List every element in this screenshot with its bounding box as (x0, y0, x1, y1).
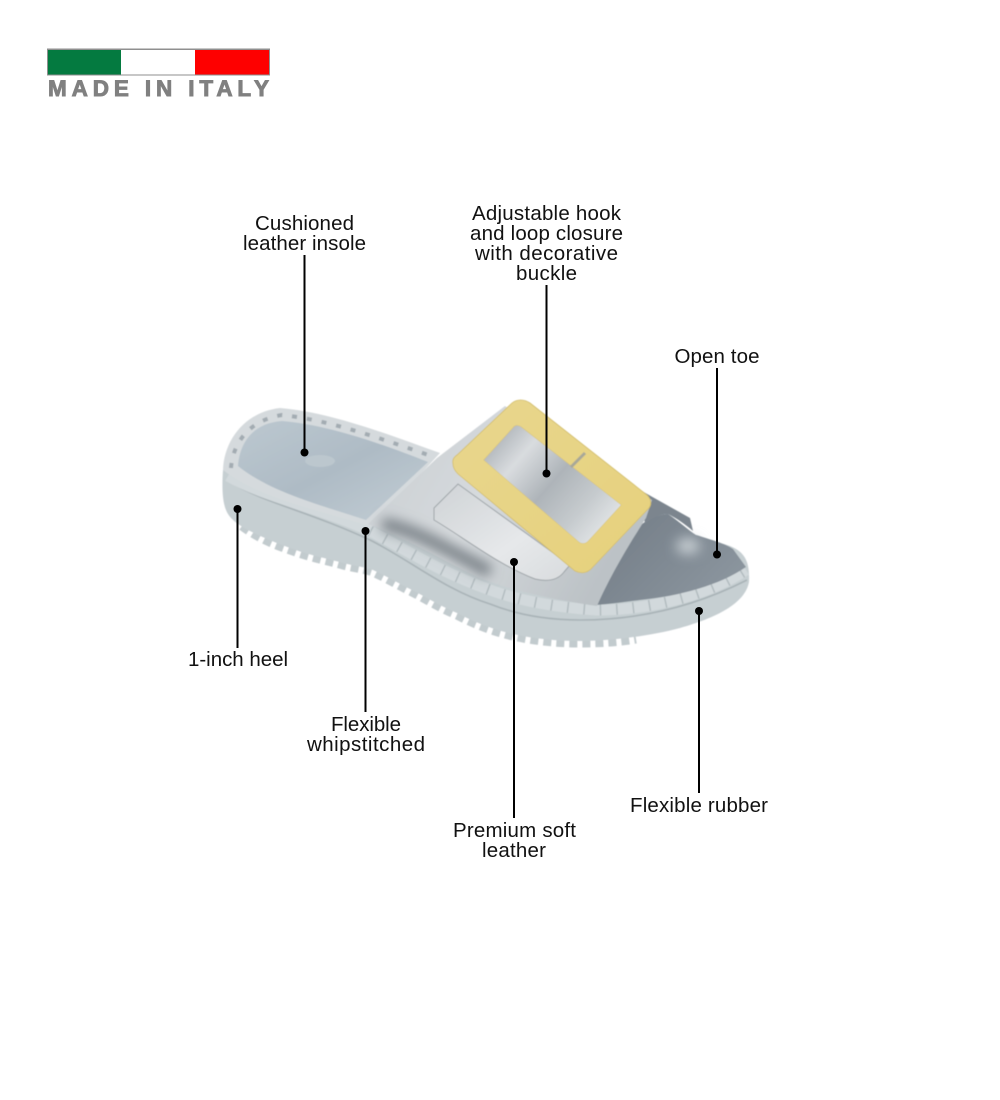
callout: cushioned leather insole: Cushioned (255, 212, 354, 235)
callout: adjustable closure: and loop closure (470, 222, 623, 245)
logo: made in Italy (47, 48, 270, 101)
strap inner back (640, 490, 693, 531)
callout: cushioned leather insole (243, 212, 366, 456)
buckle inner leather (484, 426, 621, 543)
callout: adjustable closure (470, 202, 623, 478)
rim stitching (231, 415, 434, 468)
heel footbed rim (223, 408, 440, 527)
callout: 1-inch heel (188, 505, 288, 671)
callout: premium soft leather: leather (482, 839, 546, 862)
callout: adjustable closure: Adjustable hook (472, 202, 622, 225)
heel insole (238, 421, 428, 520)
callout: 1-inch heel: 1-inch heel (188, 648, 288, 671)
buckle prong (571, 453, 585, 467)
callout: flexible whipstitched (306, 527, 425, 756)
callout: open toe: Open toe (674, 345, 760, 368)
callout: premium soft leather (453, 558, 576, 862)
strap shadow (382, 524, 490, 572)
strap (368, 406, 652, 606)
callout: flexible rubber (630, 607, 768, 817)
callout: flexible rubber: Flexible rubber (630, 794, 768, 817)
callout: open toe (674, 345, 760, 558)
callout: cushioned leather insole: leather insole (243, 232, 366, 255)
sole groove (230, 482, 747, 620)
icon: Italian flag (47, 48, 270, 76)
sole teeth (242, 526, 636, 643)
insole highlight (676, 538, 700, 554)
buckle (453, 400, 651, 573)
front insole (596, 514, 746, 605)
welt stitching (370, 531, 746, 610)
logo text: MADE IN ITALY (48, 76, 269, 101)
callout: adjustable closure: buckle (516, 262, 577, 285)
sole body (222, 468, 749, 641)
sandal illustration (222, 400, 749, 643)
callout: premium soft leather: Premium soft (453, 819, 576, 842)
callout: adjustable closure: with decorative (474, 242, 618, 265)
insole logo mark (305, 455, 335, 467)
callout: flexible whipstitched: Flexible (331, 713, 401, 736)
closure tab (434, 484, 570, 580)
stitched welt (228, 476, 746, 610)
callout: flexible whipstitched: whipstitched (306, 733, 425, 756)
